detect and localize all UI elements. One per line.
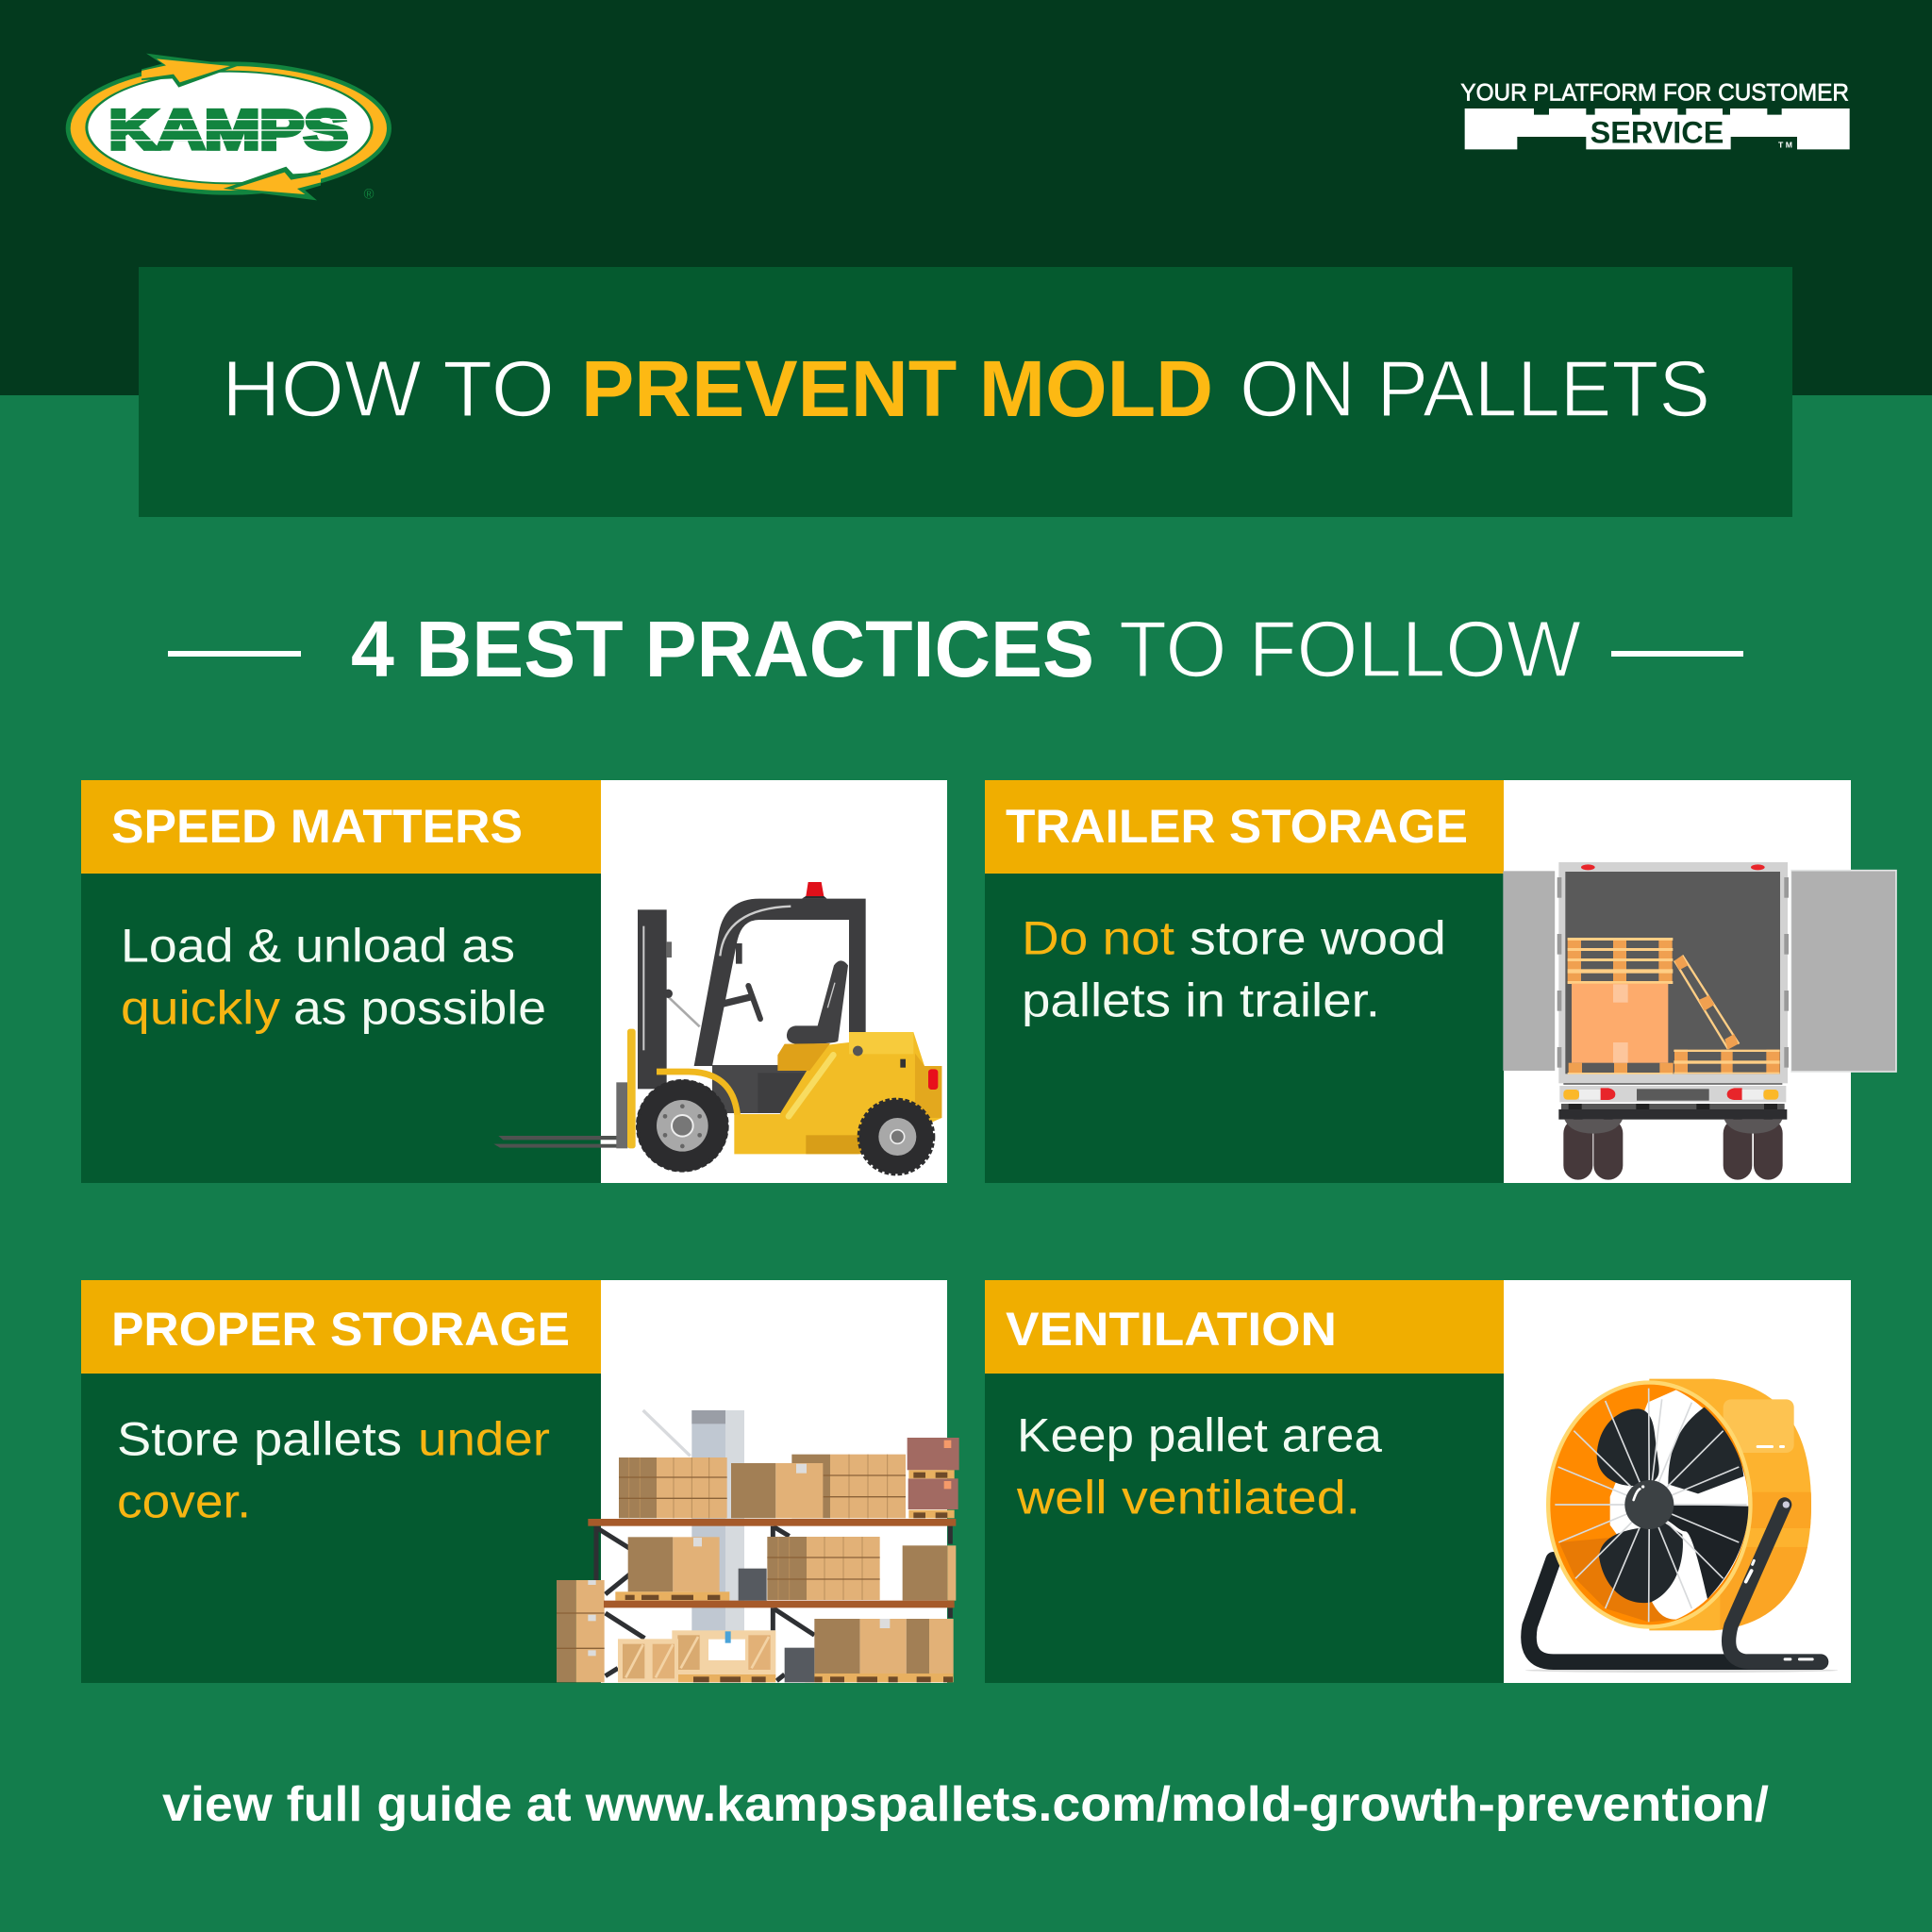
icon: forklift (493, 882, 941, 1174)
title text: ON PALLETS (1240, 344, 1710, 433)
heading: ventilation: VENTILATION (1006, 1303, 1337, 1356)
icon: open trailer with pallets (1503, 862, 1896, 1180)
body text: trailer storage (1022, 911, 1446, 1026)
body text: trailer storage: Do not (1022, 911, 1174, 964)
panel: proper storage (81, 1280, 959, 1683)
title text (222, 344, 1710, 433)
body text: trailer storage: pallets in trailer. (1022, 974, 1380, 1026)
title text: HOW TO (222, 344, 555, 433)
heading: trailer storage: TRAILER STORAGE (1006, 800, 1468, 853)
title text: PREVENT MOLD (581, 344, 1213, 433)
body text: proper storage: Store pallets (117, 1413, 402, 1466)
footer link text: view full guide at www.kampspallets.com/mold-growth-prevention/ (162, 1777, 1769, 1832)
panel: trailer storage (985, 780, 1896, 1183)
body text: proper storage: under (418, 1413, 550, 1466)
heading: proper storage: PROPER STORAGE (111, 1303, 570, 1356)
panel: ventilation (985, 1280, 1851, 1683)
logo: Kamps (66, 54, 391, 203)
logo: Kamps: ® (364, 188, 375, 203)
logo: your platform for customer service: YOUR PLATFORM FOR CUSTOMER (1460, 80, 1849, 107)
title panel (139, 267, 1792, 517)
icon: drum fan (1525, 1379, 1839, 1673)
heading: speed matters: SPEED MATTERS (111, 800, 523, 853)
section heading (168, 605, 1743, 693)
logo: your platform for customer service: TM (1778, 141, 1792, 150)
top dark header band (0, 0, 1932, 395)
section heading: 4 BEST PRACTICES (351, 605, 1094, 693)
logo: your platform for customer service (1460, 80, 1850, 150)
body text: ventilation: well ventilated. (1016, 1472, 1360, 1524)
body text: trailer storage: store wood (1190, 911, 1446, 964)
body text: proper storage: cover. (117, 1475, 251, 1528)
body text: ventilation (1016, 1409, 1382, 1524)
body text: speed matters (121, 919, 546, 1034)
body text: speed matters: as possible (293, 981, 546, 1034)
section heading: TO FOLLOW (1119, 605, 1581, 693)
logo: your platform for customer service: SERVICE (1591, 115, 1724, 150)
panel: speed matters (81, 780, 947, 1183)
logo: Kamps: KAMPS (109, 100, 348, 161)
body text: speed matters: quickly (121, 981, 280, 1034)
icon: warehouse racks with boxes (557, 1410, 959, 1682)
body text: proper storage (117, 1413, 550, 1528)
body text: speed matters: Load & unload as (121, 919, 515, 972)
body text: ventilation: Keep pallet area (1017, 1409, 1382, 1462)
